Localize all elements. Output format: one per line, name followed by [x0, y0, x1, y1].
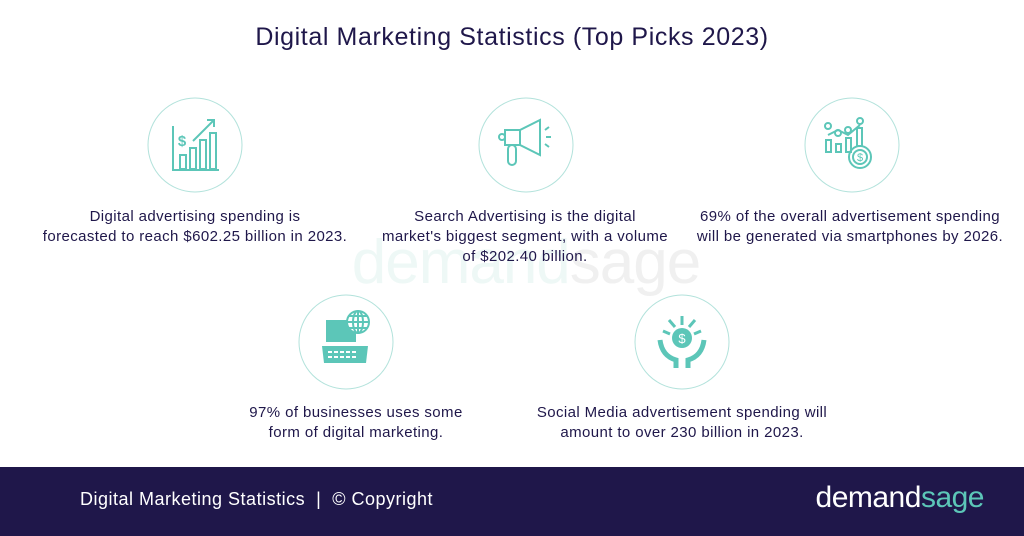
- text: stat 5: amount to over 230 billion in 2023.: [560, 424, 804, 441]
- text: stat 2: market's biggest segment, with a volume: [382, 228, 668, 245]
- text: stat 4: form of digital marketing.: [269, 424, 443, 441]
- icon: megaphone: [479, 98, 573, 192]
- icon: hands with coin: [635, 295, 729, 389]
- icon: laptop globe: [299, 295, 393, 389]
- text: stat 2: of $202.40 billion.: [462, 248, 588, 265]
- text: stat 1: [42, 208, 347, 245]
- text: stat 5: Social Media advertisement spending will: [537, 404, 827, 421]
- text: stat 2: [382, 208, 668, 265]
- text: stat 5: [537, 404, 827, 441]
- icon: chart with dollar: [148, 98, 242, 192]
- watermark: demandsage: [352, 228, 700, 297]
- footer: [0, 467, 1024, 536]
- icon: hands with coin: $: [678, 331, 686, 346]
- icon: chart with coin: $: [857, 152, 863, 164]
- text: stat 1: forecasted to reach $602.25 billion in 2023.: [43, 228, 347, 245]
- text: stat 3: 69% of the overall advertisement spending: [700, 208, 1000, 225]
- text: stat 4: [249, 404, 463, 441]
- footer logo: demandsage: [816, 481, 984, 514]
- text: stat 2: Search Advertising is the digital: [414, 208, 636, 225]
- text: stat 1: Digital advertising spending is: [90, 208, 300, 225]
- text: stat 3: [696, 208, 1003, 245]
- icon: chart with dollar: $: [178, 133, 187, 150]
- footer text: Digital Marketing Statistics | © Copyright: [80, 489, 433, 509]
- text: stat 3: will be generated via smartphones by 2026.: [697, 228, 1003, 245]
- title: Digital Marketing Statistics (Top Picks 2023): [255, 23, 769, 51]
- text: stat 4: 97% of businesses uses some: [249, 404, 463, 421]
- icon: chart with coin: [805, 98, 899, 192]
